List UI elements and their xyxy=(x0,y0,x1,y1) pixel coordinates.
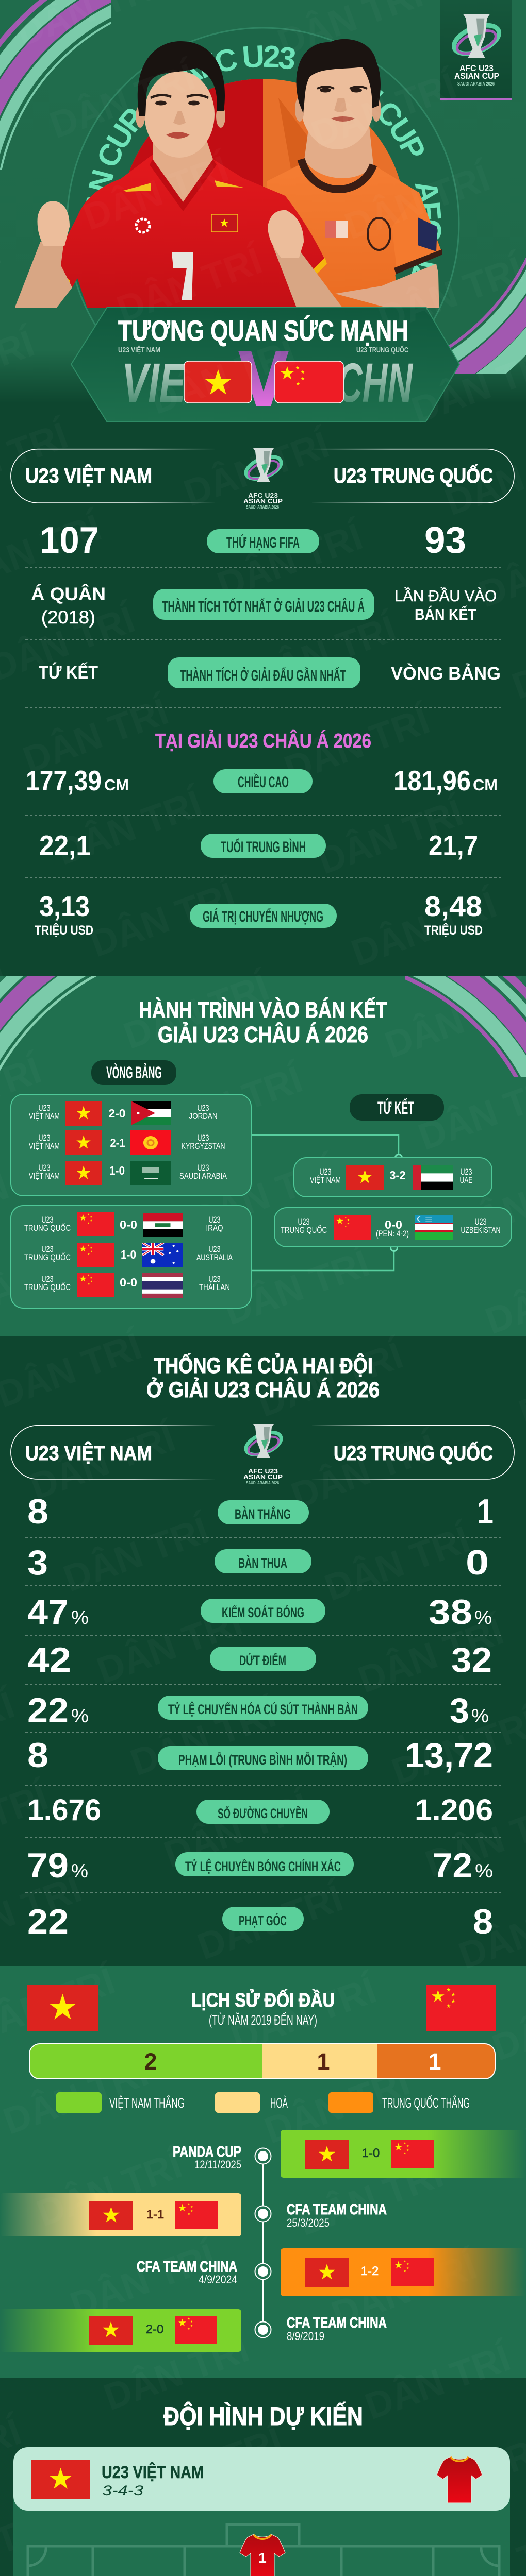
AFC logo panel: ASIAN CUP xyxy=(454,71,499,81)
match: 0-0 xyxy=(120,1276,137,1289)
match CFA 2019: 2-0 xyxy=(146,2323,163,2336)
panel: Vietnam quarter-final xyxy=(294,1158,492,1197)
legend: TRUNG QUỐC THẮNG xyxy=(382,2094,470,2111)
match xyxy=(29,1101,218,1126)
row best result: (2018) xyxy=(41,607,95,628)
header pill xyxy=(11,1426,514,1479)
title: TƯƠNG QUAN SỨC MẠNH xyxy=(118,314,408,347)
row average age: 22,1 xyxy=(39,829,91,861)
row conversion xyxy=(27,1691,489,1730)
row conceded: 3 xyxy=(27,1543,48,1582)
Vietnam player xyxy=(15,41,342,323)
row goals: BÀN THẮNG xyxy=(235,1506,291,1522)
group stage pill xyxy=(91,1060,176,1085)
match: 2-0 xyxy=(108,1107,126,1120)
row possession: 47 xyxy=(27,1592,69,1632)
players: Vietnam xyxy=(42,2534,484,2576)
match xyxy=(29,1161,227,1185)
China player xyxy=(267,39,442,321)
panel: China quarter-final: TRUNG QUỐC xyxy=(281,1225,327,1235)
match: U23 xyxy=(38,1163,51,1173)
tournament logo: ASIAN CUP xyxy=(243,1473,283,1481)
row goals xyxy=(27,1492,494,1531)
player 1 xyxy=(231,2534,293,2576)
match: AUSTRALIA xyxy=(196,1252,233,1262)
tournament logo: SAUDI ARABIA 2026 xyxy=(246,1481,279,1485)
tournament logo: AFC U23 xyxy=(248,492,278,499)
row goals: 1 xyxy=(477,1492,494,1531)
AFC logo panel: SAUDI ARABIA 2026 xyxy=(457,81,495,87)
row FIFA rank: 93 xyxy=(424,520,466,561)
row height: 177,39 xyxy=(26,765,102,796)
tournament logo xyxy=(243,1424,284,1485)
record bar: 1 xyxy=(428,2048,441,2075)
row average age: 21,7 xyxy=(429,829,478,861)
row conceded: 0 xyxy=(466,1543,489,1582)
title: GIẢI U23 CHÂU Á 2026 xyxy=(158,1022,368,1047)
flag Vietnam xyxy=(184,361,252,403)
ring text repeat left: AFC U23 ASIAN CUP xyxy=(86,108,138,201)
match: 1-0 xyxy=(109,1164,125,1177)
match: TRUNG QUỐC xyxy=(24,1252,71,1262)
title: HÀNH TRÌNH VÀO BÁN KẾT xyxy=(139,997,387,1023)
header pill xyxy=(11,449,514,503)
row shots: DỨT ĐIỂM xyxy=(239,1652,286,1668)
row height: 181,96 xyxy=(393,765,471,796)
match CFA 2025: 25/3/2025 xyxy=(287,2216,330,2229)
panel: China quarter-final: U23 xyxy=(474,1217,487,1227)
match: U23 xyxy=(41,1244,54,1254)
group stage pill: VÒNG BẢNG xyxy=(106,1063,162,1082)
match CFA 2025: CFA TEAM CHINA xyxy=(287,2201,387,2218)
title panel hexagon xyxy=(71,307,459,421)
section: tournament stats xyxy=(11,1353,514,1941)
row pass accuracy: % xyxy=(71,1860,88,1882)
pitch xyxy=(13,2468,510,2576)
match: 0-0 xyxy=(120,1218,137,1231)
logo text: AFC U23 xyxy=(459,63,494,73)
panel: China group xyxy=(11,1206,251,1308)
match CFA 2024: 1-2 xyxy=(361,2264,379,2278)
hero decorative stripes bottom right xyxy=(449,258,526,374)
row average age: TUỔI TRUNG BÌNH xyxy=(221,838,306,856)
match Panda Cup 2025: 12/11/2025 xyxy=(194,2158,241,2171)
match CFA 2024 xyxy=(137,2248,526,2296)
match CFA 2019 xyxy=(0,2309,387,2352)
match CFA 2019: 8/9/2019 xyxy=(287,2330,324,2343)
row passes: 1.676 xyxy=(27,1793,101,1827)
team label right: U23 TRUNG QUỐC xyxy=(356,345,408,354)
panel: China quarter-final: 0-0 xyxy=(385,1218,402,1231)
match: U23 xyxy=(197,1163,209,1173)
AFC logo panel xyxy=(440,0,512,100)
row latest result: TỨ KẾT xyxy=(39,662,98,683)
row height: CM xyxy=(104,776,129,794)
row shots: 32 xyxy=(451,1640,492,1680)
hero decorative stripes top left xyxy=(0,0,111,170)
match CFA 2024: CFA TEAM CHINA xyxy=(137,2259,237,2275)
panel: China quarter-final: (PEN: 4-2) xyxy=(376,1229,409,1239)
match: U23 xyxy=(41,1215,54,1225)
panel: Vietnam team header xyxy=(13,2447,510,2511)
row transfer value: GIÁ TRỊ CHUYỂN NHƯỢNG xyxy=(203,908,323,925)
match: IRAQ xyxy=(206,1223,223,1233)
row possession: % xyxy=(474,1607,492,1628)
row best result: BÁN KẾT xyxy=(415,605,476,623)
row pass accuracy: % xyxy=(475,1860,493,1882)
quarter-final pill xyxy=(350,1094,444,1121)
match: SAUDI ARABIA xyxy=(179,1171,227,1181)
row fouls xyxy=(27,1736,493,1775)
match: U23 xyxy=(197,1133,209,1143)
team label left: U23 VIỆT NAM xyxy=(118,345,160,354)
row pass accuracy: TỶ LỆ CHUYỀN BÓNG CHÍNH XÁC xyxy=(185,1858,341,1874)
panel: Vietnam quarter-final: VIỆT NAM xyxy=(310,1175,341,1185)
legend xyxy=(56,2092,470,2113)
tournament logo: ASIAN CUP xyxy=(243,497,283,505)
row transfer value: 3,13 xyxy=(39,890,90,922)
flag Vietnam xyxy=(27,1985,98,2031)
panel: Vietnam quarter-final: U23 xyxy=(460,1167,472,1177)
record bar xyxy=(29,2044,495,2079)
row best result: LẦN ĐẦU VÀO xyxy=(395,587,497,605)
match: VIỆT NAM xyxy=(29,1171,60,1181)
row conversion: 3 xyxy=(450,1691,469,1730)
header pill: U23 VIỆT NAM xyxy=(25,1441,152,1465)
title: Ở GIẢI U23 CHÂU Á 2026 xyxy=(146,1377,380,1402)
match: TRUNG QUỐC xyxy=(24,1223,71,1233)
title xyxy=(146,1353,380,1402)
row conversion: % xyxy=(471,1705,489,1726)
quarter-final pill: TỨ KẾT xyxy=(377,1098,414,1118)
match xyxy=(24,1273,230,1298)
panel: Vietnam team header: 3-4-3 xyxy=(102,2483,143,2498)
row latest result: THÀNH TÍCH Ở GIẢI ĐẤU GẦN NHẤT xyxy=(180,667,346,684)
section: comparison xyxy=(11,448,514,938)
right arm xyxy=(273,247,342,308)
hero circular emblem xyxy=(67,27,460,326)
match: KYRGYZSTAN xyxy=(182,1141,225,1151)
row shots: 42 xyxy=(27,1640,71,1680)
row possession xyxy=(27,1592,492,1632)
row possession: 38 xyxy=(429,1592,472,1632)
left fist xyxy=(37,201,70,246)
flag China xyxy=(275,361,343,403)
timeline xyxy=(255,2148,271,2338)
match: U23 xyxy=(38,1133,51,1143)
match: 1-0 xyxy=(121,1248,136,1261)
match: U23 xyxy=(197,1103,209,1113)
row shots xyxy=(27,1640,492,1680)
title: THỐNG KÊ CỦA HAI ĐỘI xyxy=(154,1353,373,1378)
row pass accuracy: 79 xyxy=(27,1846,69,1885)
match: VIỆT NAM xyxy=(29,1141,60,1151)
tournament logo xyxy=(243,448,284,510)
row conversion: % xyxy=(71,1705,89,1726)
header pill: U23 TRUNG QUỐC xyxy=(334,1441,493,1465)
panel: China quarter-final xyxy=(274,1208,512,1247)
tournament logo: SAUDI ARABIA 2026 xyxy=(246,505,279,510)
record bar: 1 xyxy=(317,2048,330,2075)
match: TRUNG QUỐC xyxy=(24,1282,71,1292)
left arm xyxy=(15,242,72,308)
row latest result xyxy=(39,657,501,688)
row best result xyxy=(31,584,497,628)
row corners: PHẠT GÓC xyxy=(239,1912,287,1928)
row possession: % xyxy=(71,1607,89,1628)
legend: HOÀ xyxy=(270,2095,288,2111)
match: U23 xyxy=(38,1103,51,1113)
match Panda Cup 2025: 1-0 xyxy=(362,2146,380,2160)
match: JORDAN xyxy=(189,1111,218,1121)
row conceded: BÀN THUA xyxy=(238,1555,287,1571)
row average age xyxy=(39,829,478,861)
title: LỊCH SỬ ĐỐI ĐẦU xyxy=(191,1988,335,2011)
row height xyxy=(26,765,498,796)
row transfer value: TRIỆU USD xyxy=(424,922,483,938)
row passes: 1.206 xyxy=(415,1793,493,1827)
row fouls: 13,72 xyxy=(405,1736,493,1775)
subheading 2026: TẠI GIẢI U23 CHÂU Á 2026 xyxy=(155,730,371,752)
flag China xyxy=(426,1985,496,2031)
row best result: Á QUÂN xyxy=(31,584,106,604)
panel: China quarter-final: UZBEKISTAN xyxy=(461,1225,500,1235)
record bar: 2 xyxy=(144,2048,157,2075)
section stripes left xyxy=(0,976,96,1071)
match: U23 xyxy=(208,1244,221,1254)
match: U23 xyxy=(208,1274,221,1284)
connector Vietnam xyxy=(251,1135,402,1161)
row corners: 22 xyxy=(27,1902,69,1941)
match Panda Cup 2025: PANDA CUP xyxy=(173,2144,241,2160)
section stripes right xyxy=(405,976,526,1077)
row transfer value: TRIỆU USD xyxy=(35,922,93,938)
row conversion: 22 xyxy=(27,1691,69,1730)
match: THÁI LAN xyxy=(199,1282,230,1292)
hair xyxy=(138,41,225,116)
title: (TỪ NĂM 2019 ĐẾN NAY) xyxy=(209,2012,317,2028)
row possession: KIỂM SOÁT BÓNG xyxy=(222,1604,304,1620)
match xyxy=(29,1130,225,1155)
match: VIỆT NAM xyxy=(29,1111,60,1121)
ring text: AFC U23 ASIAN CUP xyxy=(183,45,424,156)
panel: Vietnam quarter-final: 3-2 xyxy=(390,1168,405,1182)
ring text repeat right: AFC U23 ASIAN CUP xyxy=(412,183,441,274)
row pass accuracy: 72 xyxy=(433,1846,472,1885)
match xyxy=(24,1212,223,1237)
row goals: 8 xyxy=(27,1492,48,1531)
row height: CHIỀU CAO xyxy=(238,773,289,791)
panel: Vietnam quarter-final: UAE xyxy=(460,1175,472,1185)
row conceded xyxy=(27,1543,489,1582)
legend: VIỆT NAM THẮNG xyxy=(109,2095,185,2111)
panel: Vietnam quarter-final: U23 xyxy=(320,1167,331,1177)
section: road to semi-finals xyxy=(11,997,512,1308)
match Panda Cup 2025 xyxy=(173,2130,526,2178)
section: head to head xyxy=(0,1985,526,2352)
player 1: 1 xyxy=(258,2550,267,2566)
CHN large: CHN xyxy=(337,351,413,414)
row best result: THÀNH TÍCH TỐT NHẤT Ở GIẢI U23 CHÂU Á xyxy=(162,598,365,615)
row height: CM xyxy=(473,776,498,794)
row corners: 8 xyxy=(473,1902,493,1941)
panel: China quarter-final: U23 xyxy=(298,1217,309,1227)
VIE large: VIE xyxy=(122,351,187,414)
row pass accuracy xyxy=(27,1846,493,1885)
V mark xyxy=(238,351,289,406)
header pill: U23 TRUNG QUỐC xyxy=(334,464,493,487)
logo trophy xyxy=(450,14,503,59)
row corners xyxy=(27,1902,493,1941)
row transfer value: 8,48 xyxy=(424,890,482,922)
row passes: SỐ ĐƯỜNG CHUYỀN xyxy=(218,1805,308,1821)
row FIFA rank: 107 xyxy=(40,520,99,561)
row FIFA rank: THỨ HẠNG FIFA xyxy=(226,534,300,551)
panel: Vietnam group xyxy=(11,1094,251,1196)
row latest result: VÒNG BẢNG xyxy=(391,663,501,684)
connector China xyxy=(251,1245,397,1270)
panel: Vietnam team header: U23 VIỆT NAM xyxy=(102,2463,204,2482)
match: U23 xyxy=(208,1215,221,1225)
face xyxy=(144,71,215,158)
title xyxy=(191,1988,335,2028)
row FIFA rank xyxy=(40,520,466,561)
row passes xyxy=(27,1793,493,1827)
jersey xyxy=(15,139,342,323)
match CFA 2025 xyxy=(0,2193,387,2236)
heading: predicted lineups: ĐỘI HÌNH DỰ KIẾN xyxy=(163,2401,363,2431)
right fist xyxy=(268,210,304,258)
row conversion: TỶ LỆ CHUYỂN HÓA CÚ SÚT THÀNH BÀN xyxy=(168,1701,358,1717)
match CFA 2025: 1-1 xyxy=(146,2208,164,2222)
match xyxy=(24,1243,233,1267)
row fouls: PHẠM LỖI (TRUNG BÌNH MỖI TRẬN) xyxy=(178,1752,347,1768)
tournament logo: AFC U23 xyxy=(248,1467,278,1475)
row transfer value xyxy=(35,890,483,938)
match CFA 2024: 4/9/2024 xyxy=(199,2273,237,2286)
title xyxy=(139,997,387,1047)
row fouls: 8 xyxy=(27,1736,48,1775)
match: U23 xyxy=(41,1274,54,1284)
header pill: U23 VIỆT NAM xyxy=(25,464,152,487)
match CFA 2019: CFA TEAM CHINA xyxy=(287,2315,387,2331)
match: 2-1 xyxy=(110,1136,125,1149)
